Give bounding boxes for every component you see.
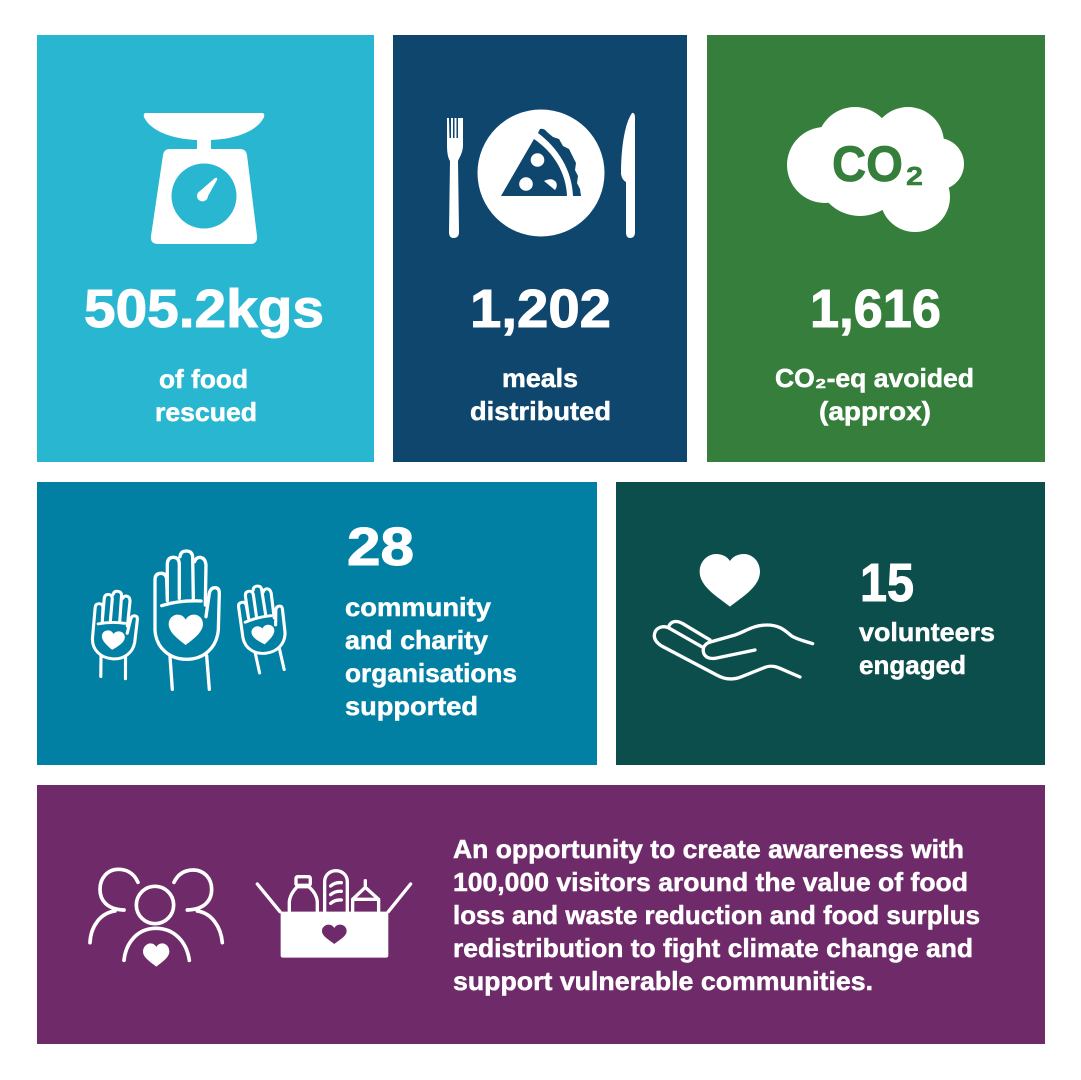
paragraph: awareness statement: support vulnerable communities. [453,966,873,996]
stat: 28: 28 [347,517,414,577]
icon: raised hands with hearts [89,551,291,689]
panel: awareness [37,785,1045,1044]
label: CO2-eq avoided (approx): CO₂-eq avoided [775,363,974,393]
icon: open hand with heart [654,554,813,679]
label: of food rescued: rescued [155,397,257,427]
label: volunteers engaged: engaged [859,650,966,680]
label: of food rescued [155,364,257,427]
paragraph: awareness statement: loss and waste reduction and food surplus [453,900,980,930]
stat: 505.2kgs: 505.2kgs [84,279,324,339]
icon: plate with pizza and cutlery [447,110,635,238]
stat: 1,202: 1,202 [470,279,611,339]
label: meals distributed: meals [502,363,578,393]
panel: CO2 avoided [707,35,1045,462]
label: meals distributed [470,363,611,426]
label: meals distributed: distributed [470,396,611,426]
label: volunteers engaged: volunteers [859,617,995,647]
icon: small left hand [89,589,140,679]
stat: 15: 15 [860,553,914,613]
panel: meals distributed [393,35,687,462]
panel: organisations supported [37,482,597,765]
label: community and charity organisations supported: supported [345,691,478,721]
label: CO2-eq avoided (approx): (approx) [819,396,931,426]
label: community and charity organisations supported: community [345,592,492,622]
paragraph: awareness statement: An opportunity to create awareness with [453,834,964,864]
icon: CO2 cloud: 2 [906,161,923,191]
icon: CO2 cloud: CO [832,136,903,192]
icon: kitchen scale [144,113,264,244]
icon: small right hand [236,583,291,675]
label: CO2-eq avoided (approx) [775,363,974,426]
icon: food donation box [257,871,411,958]
panel: volunteers engaged [616,482,1045,765]
label: community and charity organisations supported: and charity [345,625,489,655]
icon: CO2 cloud [787,107,964,232]
paragraph: awareness statement: 100,000 visitors around the value of food [453,867,968,897]
label: of food rescued: of food [159,364,248,394]
icon: large hand [155,551,219,689]
label: community and charity organisations supported [345,592,517,721]
panel: food rescued [37,35,374,462]
paragraph: awareness statement [453,834,980,996]
icon: community group [90,869,222,967]
label: volunteers engaged [859,617,995,680]
label: community and charity organisations supported: organisations [345,658,517,688]
paragraph: awareness statement: redistribution to fight climate change and [453,933,973,963]
stat: 1,616: 1,616 [810,279,941,339]
